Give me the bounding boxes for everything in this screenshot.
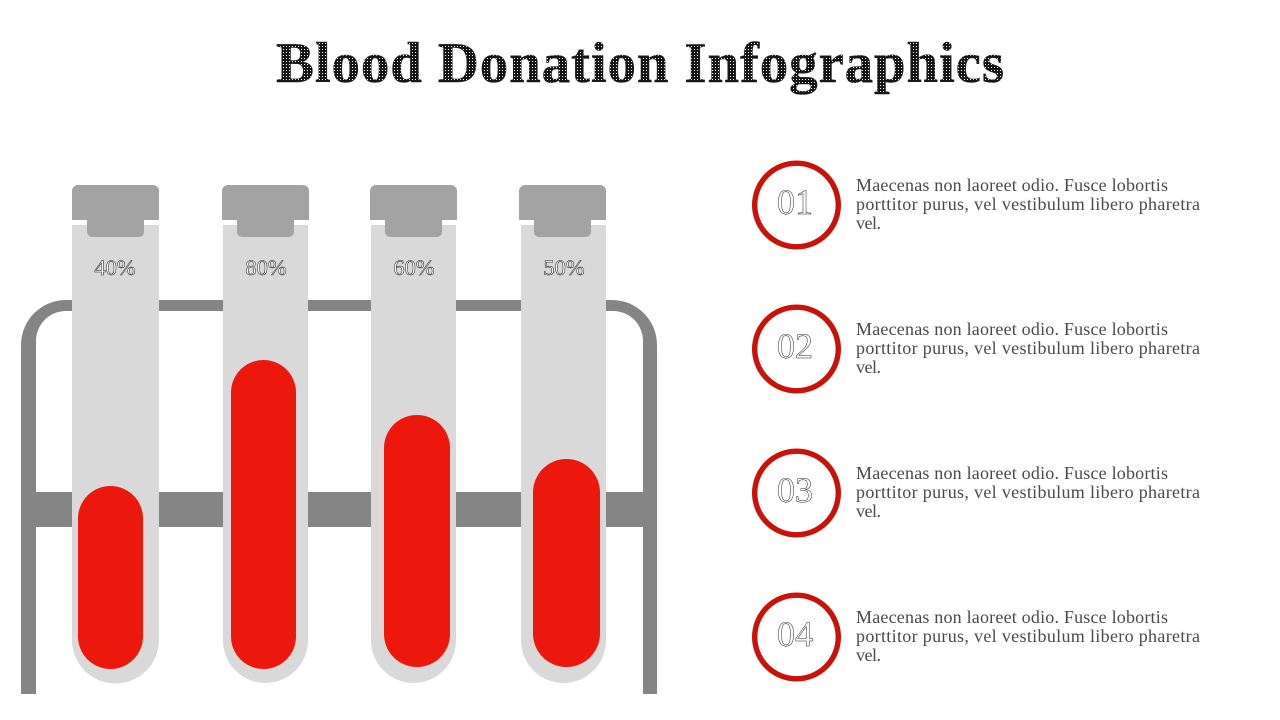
list item 02: porttitor purus, vel vestibulum libero pharetra bbox=[856, 338, 1200, 358]
title: Blood Donation Infographics bbox=[276, 32, 1004, 95]
tube 3: 60% bbox=[370, 185, 457, 683]
tube 2: 80%: 80% bbox=[245, 255, 287, 280]
tube 4: 50% bbox=[519, 185, 606, 683]
tube 4: 50%: 50% bbox=[543, 255, 585, 280]
rack frame bbox=[21, 300, 657, 694]
tube 1: 40%: 40% bbox=[94, 255, 136, 280]
tube 3: 60%: 60% bbox=[393, 255, 435, 280]
list item 03: 03 bbox=[777, 470, 813, 510]
list item 02: vel. bbox=[856, 357, 881, 377]
rack crossbar bbox=[21, 492, 657, 527]
list item 02: Maecenas non laoreet odio. Fusce lobortis bbox=[856, 319, 1168, 339]
tube 1: 40% bbox=[72, 185, 159, 684]
list item 04: vel. bbox=[856, 645, 881, 665]
tube 2: 80% bbox=[222, 185, 309, 683]
list item 01 bbox=[755, 163, 1200, 247]
list item 02 bbox=[755, 307, 1200, 391]
list item 01: Maecenas non laoreet odio. Fusce lobortis bbox=[856, 175, 1168, 195]
list item 01: 01 bbox=[777, 182, 813, 222]
list item 04 bbox=[755, 595, 1200, 679]
list item 03: porttitor purus, vel vestibulum libero pharetra bbox=[856, 482, 1200, 502]
list item 04: porttitor purus, vel vestibulum libero pharetra bbox=[856, 626, 1200, 646]
list item 03 bbox=[755, 451, 1200, 535]
test tube rack chart bbox=[21, 185, 657, 694]
list item 02: 02 bbox=[777, 326, 813, 366]
list item 03: vel. bbox=[856, 501, 881, 521]
list item 01: porttitor purus, vel vestibulum libero pharetra bbox=[856, 194, 1200, 214]
list item 04: Maecenas non laoreet odio. Fusce lobortis bbox=[856, 607, 1168, 627]
list item 04: 04 bbox=[777, 614, 813, 654]
list item 03: Maecenas non laoreet odio. Fusce lobortis bbox=[856, 463, 1168, 483]
list item 01: vel. bbox=[856, 213, 881, 233]
